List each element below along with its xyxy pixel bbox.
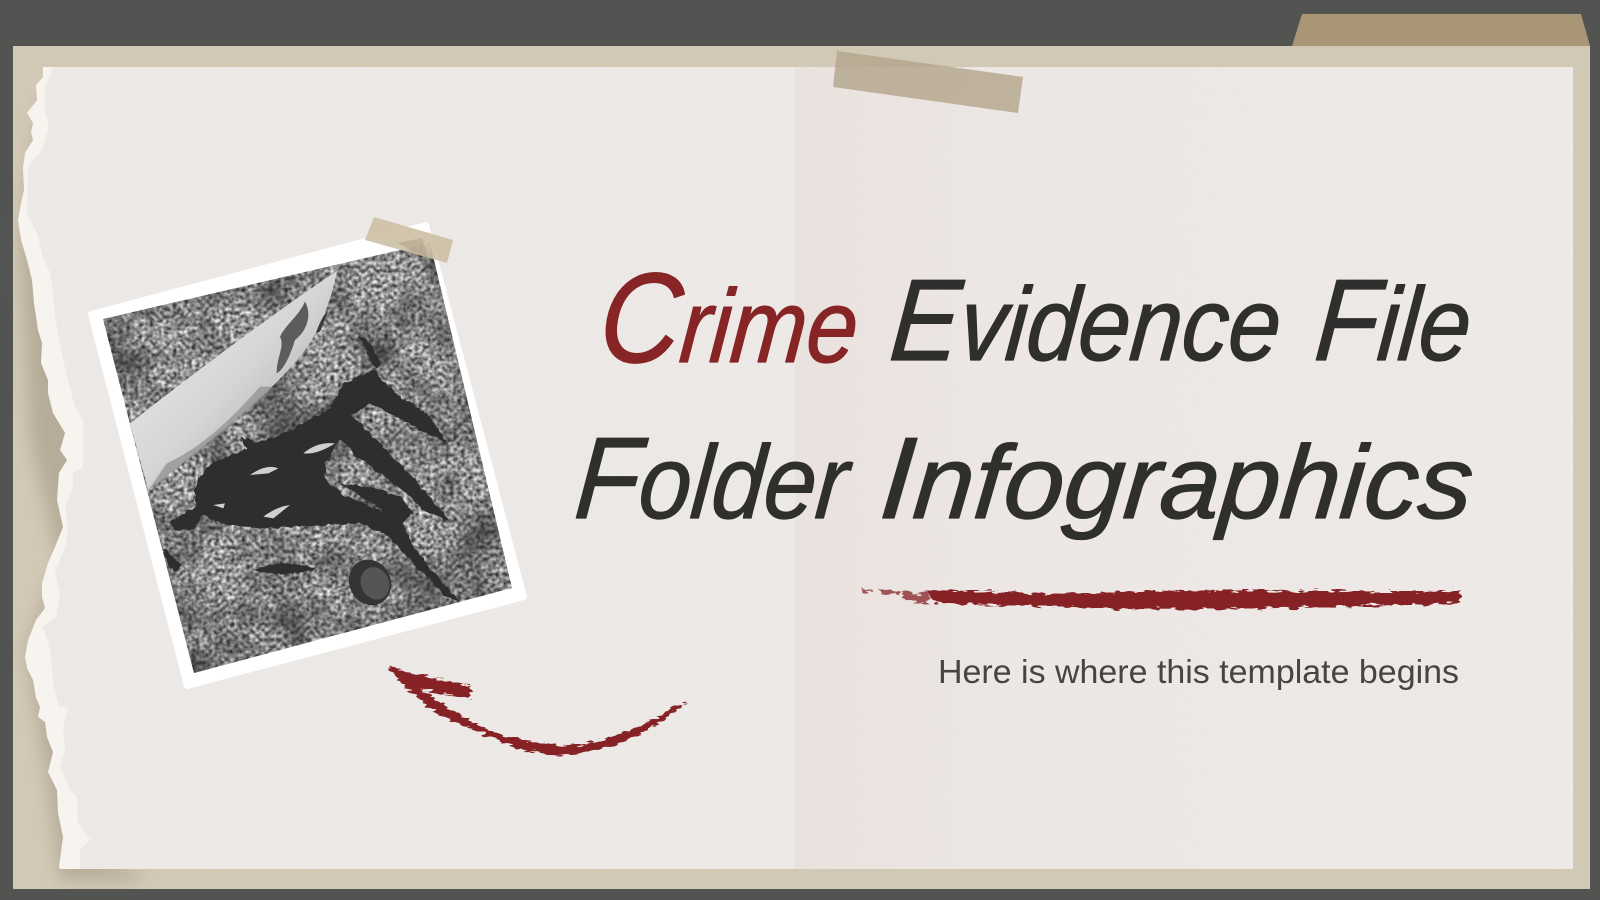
concrete texture bbox=[103, 243, 512, 673]
right half of folded sheet bbox=[795, 67, 1573, 869]
blade edge reflection bbox=[148, 387, 273, 490]
blood shapes bbox=[163, 336, 460, 603]
title word: Folder: Folder bbox=[571, 413, 858, 543]
blood branch bbox=[340, 483, 413, 525]
blood spot large bbox=[348, 560, 392, 606]
title word: Crime: Crime bbox=[595, 247, 865, 390]
torn white edge bbox=[18, 67, 200, 869]
photo white frame bbox=[91, 225, 524, 686]
red brush underline bbox=[862, 588, 1461, 609]
blood streak tip bbox=[358, 336, 382, 368]
blood pool bbox=[169, 415, 460, 603]
tape on photo bbox=[365, 217, 453, 263]
photo image bbox=[103, 243, 512, 673]
tape: top of sheet bbox=[833, 51, 1023, 113]
polaroid photo of knife bbox=[80, 217, 530, 690]
folder tab bbox=[1292, 14, 1590, 46]
concrete blotches bbox=[103, 250, 512, 673]
knife blade bbox=[130, 271, 337, 490]
knife and blood in zoom coordinates bbox=[130, 271, 460, 612]
red arrow pointing to photo bbox=[388, 667, 686, 755]
blood highlights bbox=[213, 443, 335, 518]
arrow head barb bbox=[388, 667, 471, 699]
blood streak right bbox=[317, 400, 450, 522]
arrow shaft bbox=[388, 668, 686, 755]
title bbox=[571, 247, 1479, 543]
title word: File: File bbox=[1311, 255, 1477, 385]
blood spot leaf bbox=[255, 563, 317, 574]
title word: Evidence: Evidence bbox=[886, 255, 1287, 385]
blood smear on blade bbox=[277, 302, 308, 373]
blood drip on blade bbox=[316, 310, 328, 333]
dry brush start bbox=[862, 588, 930, 604]
title word: Infographics: Infographics bbox=[876, 413, 1479, 543]
paper body bbox=[27, 67, 795, 869]
blood arm upper bbox=[333, 370, 448, 443]
photo vignette bbox=[181, 542, 512, 673]
subtitle: Here is where this template begins bbox=[938, 653, 1459, 690]
brush stroke bbox=[925, 590, 1461, 609]
paper shadow bbox=[20, 100, 140, 880]
blood spot edge bbox=[163, 548, 182, 572]
